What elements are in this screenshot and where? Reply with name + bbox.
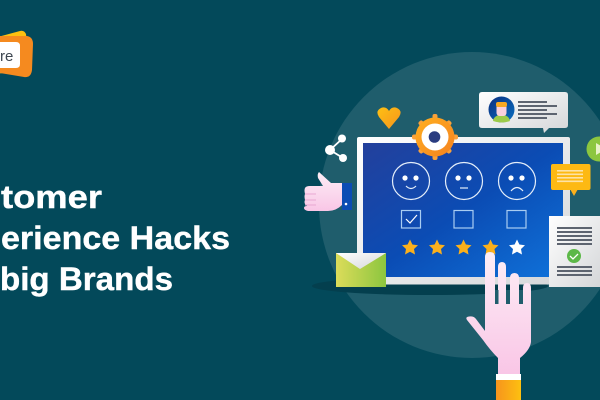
logo: re (0, 48, 13, 65)
rating stars (402, 240, 525, 254)
icon: play button (586, 136, 600, 162)
avatar (488, 96, 514, 122)
left hand (304, 172, 352, 211)
note card (551, 164, 590, 196)
title: erience Hacks (1, 220, 230, 256)
icon: gear (412, 114, 458, 160)
background circle (319, 52, 600, 358)
envelope (336, 253, 386, 287)
shirt cuff (496, 374, 521, 380)
pointing hand (466, 252, 531, 400)
speech bubble (479, 92, 568, 133)
emoji faces (392, 162, 536, 200)
icon: share (325, 134, 347, 162)
face eyes (402, 175, 525, 181)
document (549, 216, 600, 287)
sleeve (496, 380, 521, 400)
title (0, 179, 230, 297)
title: tomer (1, 179, 102, 215)
monitor (357, 137, 570, 284)
message lines (518, 101, 557, 119)
icon: heart (377, 107, 401, 129)
checkboxes (402, 210, 526, 228)
title: big Brands (0, 261, 173, 297)
logo (0, 31, 33, 77)
monitor shadow (312, 277, 548, 295)
